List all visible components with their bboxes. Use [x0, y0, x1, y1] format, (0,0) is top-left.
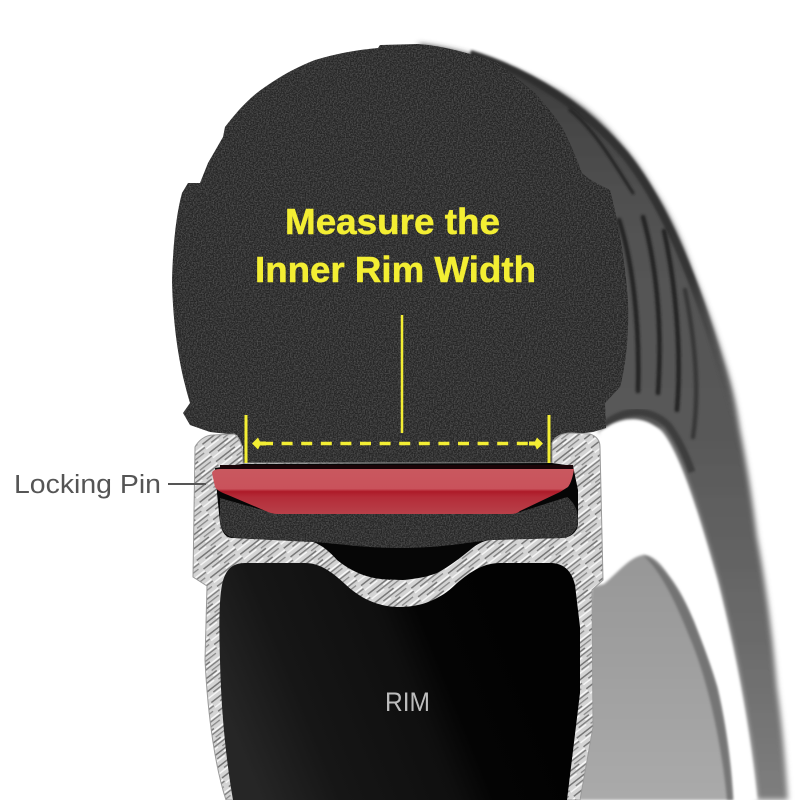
tire sidewall with tread	[418, 44, 788, 800]
inner tube cross-section	[172, 44, 628, 470]
locking pin red strip	[212, 465, 574, 514]
right arrowhead	[529, 438, 543, 450]
heading: Inner Rim Width	[255, 249, 536, 290]
dark tread junction above the white gap	[604, 412, 692, 472]
dashed width line	[262, 442, 533, 445]
outer dark tread edge	[470, 54, 736, 425]
grey brake disc	[575, 555, 733, 800]
aluminium rim with hatch texture	[193, 433, 603, 800]
left arrowhead	[252, 438, 266, 450]
measurement markers	[246, 315, 549, 463]
right limit	[548, 415, 550, 463]
tread grooves	[570, 110, 696, 437]
upper rim channel	[215, 463, 578, 580]
label: locking pin: Locking Pin	[14, 471, 161, 499]
lower rim hollow	[219, 563, 580, 800]
label: rim: RIM	[385, 687, 430, 717]
heading	[255, 201, 536, 290]
white gap behind the tire	[590, 419, 757, 800]
disc dark rim edge	[643, 555, 733, 800]
heading: Measure the	[285, 201, 500, 242]
tube section in channel	[220, 497, 578, 548]
left limit	[244, 415, 248, 463]
leader line	[401, 315, 403, 433]
